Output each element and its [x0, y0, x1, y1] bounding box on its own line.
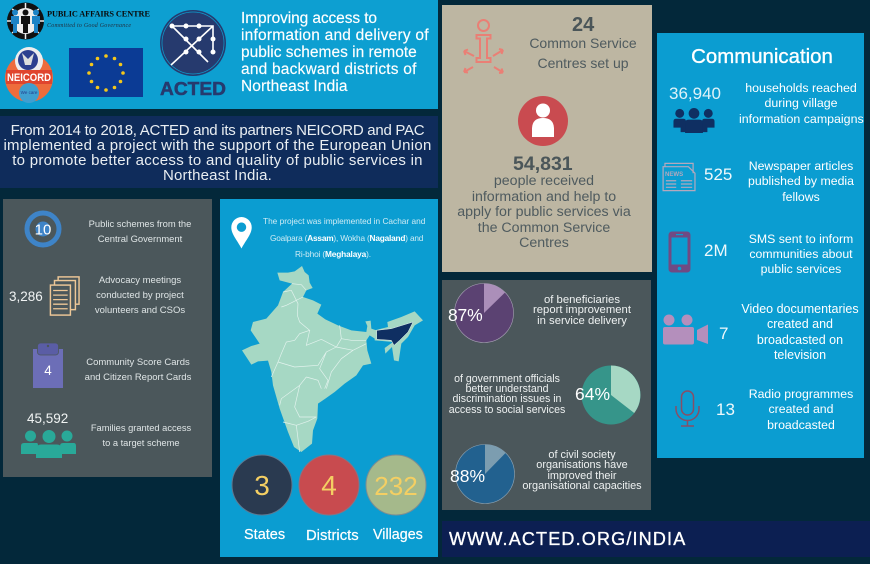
stat: villages — [366, 454, 426, 516]
stat: 7: 7 — [719, 324, 728, 343]
panel: service centres — [442, 5, 652, 272]
text: common service centres: Centres set up — [537, 55, 629, 71]
logo: Public Affairs Centre: PUBLIC AFFAIRS CENTRE — [47, 10, 150, 18]
icon: location pin — [231, 217, 252, 248]
text: beneficiaries: of beneficiaries — [544, 294, 620, 306]
text: government officials: of government officials — [454, 372, 560, 384]
pie chart: 64%: 64% — [575, 384, 610, 404]
text: video — [741, 302, 859, 362]
text: beneficiaries — [533, 294, 631, 327]
icon: microphone — [675, 390, 700, 427]
icon: mobile phone — [668, 232, 690, 272]
text: public schemes: Central Government — [98, 233, 182, 244]
stat: 525: 525 — [704, 165, 732, 184]
heading: communication: Communication — [691, 46, 833, 68]
label: villages: Villages — [373, 527, 423, 543]
panel: website bar — [442, 521, 870, 557]
icon: ring with 10: 10 — [35, 222, 51, 238]
text: families: to a target scheme — [102, 438, 180, 448]
text: people received: the Common Service — [478, 220, 610, 236]
stat: districts — [298, 454, 360, 516]
text: implementation: Ri-bhoi (Meghalaya). — [295, 249, 371, 259]
text: households: during village — [764, 96, 838, 110]
text: radio: Radio programmes — [749, 387, 853, 401]
stat: 13: 13 — [716, 400, 735, 419]
pie chart: 64% — [575, 366, 640, 424]
title: Improving access to — [241, 10, 377, 27]
logo: Public Affairs Centre — [7, 2, 150, 40]
text: civil society: improved their — [547, 470, 616, 482]
stat: 24: 24 — [572, 14, 594, 36]
panel: outputs — [3, 199, 212, 477]
text: civil society: organisations have — [536, 459, 628, 471]
text: people received: Centres — [519, 235, 569, 251]
text: people received — [457, 173, 631, 251]
title: public schemes in remote — [241, 44, 417, 61]
stat: villages: 232 — [374, 471, 418, 501]
logo: ACTED — [160, 10, 226, 99]
text: video: broadcasted on — [757, 333, 843, 347]
introduction text: implemented a project with the support of the European Union — [3, 137, 432, 154]
text: video: television — [774, 348, 826, 362]
text: advocacy meetings: Advocacy meetings — [99, 275, 181, 286]
text: government officials — [449, 372, 565, 416]
icon: person in circle — [518, 96, 568, 146]
icon: clipboard with 4: 4 — [44, 363, 52, 378]
stat: districts: 4 — [321, 470, 337, 501]
logo: Public Affairs Centre: Committed to Good Governance — [47, 23, 131, 29]
label: states: States — [244, 527, 285, 543]
title — [241, 10, 429, 95]
text: beneficiaries: report improvement — [533, 304, 631, 316]
text: government officials: access to social services — [449, 404, 565, 416]
text: advocacy meetings — [94, 275, 185, 316]
text: people received: apply for public services via — [457, 204, 631, 220]
text: newspaper: published by media — [748, 174, 854, 188]
introduction text: to promote better access to and quality of public services in — [12, 152, 423, 169]
icon: clipboard with 4 — [33, 343, 63, 388]
panel: map — [220, 199, 438, 557]
text: households — [739, 81, 864, 126]
icon: documents — [50, 276, 80, 316]
icon: households — [673, 108, 715, 133]
stat: 2M: 2M — [704, 241, 728, 260]
text: SMS: communities about — [749, 247, 853, 261]
logo: NEICORD — [5, 47, 53, 103]
introduction text: From 2014 to 2018, ACTED and its partners NEICORD and PAC — [11, 122, 424, 139]
text: video: Video documentaries — [741, 302, 859, 316]
icon: newspaper — [662, 162, 696, 192]
text: implementation: Goalpara (Assam), Wokha (Nagaland) and — [270, 232, 423, 242]
text: civil society: organisational capacities — [522, 480, 642, 492]
text: SMS — [749, 232, 853, 276]
text: households: information campaigns — [739, 112, 864, 126]
logo: NEICORD: We care — [21, 90, 38, 95]
icon: information arrows — [463, 19, 504, 74]
text: score cards: and Citizen Report Cards — [85, 372, 191, 383]
stat: 3,286: 3,286 — [9, 289, 43, 304]
text: families: Families granted access — [91, 423, 191, 433]
text: newspaper: Newspaper articles — [749, 159, 853, 173]
title: information and delivery of — [241, 27, 429, 44]
panel: introduction — [0, 116, 438, 188]
text: households: households reached — [745, 81, 857, 95]
website link: WWW.ACTED.ORG/INDIA — [449, 529, 686, 549]
pie chart: 88%: 88% — [450, 466, 485, 486]
icon: video camera — [663, 314, 708, 344]
logo: EU flag — [69, 48, 143, 97]
map of India — [242, 266, 423, 452]
text: public schemes: Public schemes from the — [89, 218, 191, 229]
stat: states — [232, 454, 292, 516]
text: radio — [749, 387, 853, 432]
text: SMS: SMS sent to inform — [749, 232, 853, 246]
title: and backward districts of — [241, 61, 417, 78]
text: beneficiaries: in service delivery — [537, 315, 627, 327]
text: newspaper — [748, 159, 854, 204]
label: districts: Districts — [306, 528, 359, 544]
text: people received: people received — [494, 173, 594, 189]
stat: 36,940: 36,940 — [669, 84, 721, 103]
text: radio: broadcasted — [767, 418, 835, 432]
stat: states: 3 — [254, 470, 270, 501]
pie chart: 87%: 87% — [448, 305, 482, 325]
text: implementation — [263, 216, 425, 259]
text: video: created and — [767, 317, 833, 331]
title: Northeast India — [241, 78, 348, 95]
icon: newspaper: NEWS — [665, 171, 683, 178]
text: advocacy meetings: conducted by project — [96, 290, 184, 301]
text: people received: information and help to — [472, 188, 616, 204]
logo: ACTED: ACTED — [160, 78, 226, 99]
stat: 54,831: 54,831 — [513, 153, 573, 175]
stat: 45,592: 45,592 — [27, 411, 68, 426]
text: government officials: discrimination issues in — [453, 393, 561, 405]
text: implementation: The project was implemented in Cachar and — [263, 216, 425, 226]
panel: communication — [657, 33, 864, 458]
text: common service centres: Common Service — [529, 35, 637, 51]
text: public schemes — [89, 218, 191, 244]
text: score cards: Community Score Cards — [86, 357, 190, 368]
panel: header — [0, 0, 438, 109]
text: radio: created and — [769, 402, 833, 416]
pie chart: 87% — [448, 283, 514, 343]
text: government officials: better understand — [465, 383, 549, 395]
text: newspaper: fellows — [782, 190, 820, 204]
icon: ring with 10 — [24, 210, 62, 248]
text: advocacy meetings: volunteers and CSOs — [95, 305, 185, 316]
text: families — [91, 423, 191, 448]
icon: families — [21, 430, 76, 458]
text: SMS: public services — [761, 262, 841, 276]
introduction text: Northeast India. — [163, 167, 272, 184]
text: civil society: of civil society — [548, 449, 616, 461]
introduction text — [3, 122, 432, 184]
panel: percentages — [442, 280, 651, 510]
text: civil society — [522, 449, 642, 492]
logo: NEICORD: NEICORD — [7, 72, 51, 84]
pie chart: 88% — [450, 444, 515, 504]
text: score cards — [85, 357, 191, 383]
text: common service centres — [529, 35, 637, 71]
